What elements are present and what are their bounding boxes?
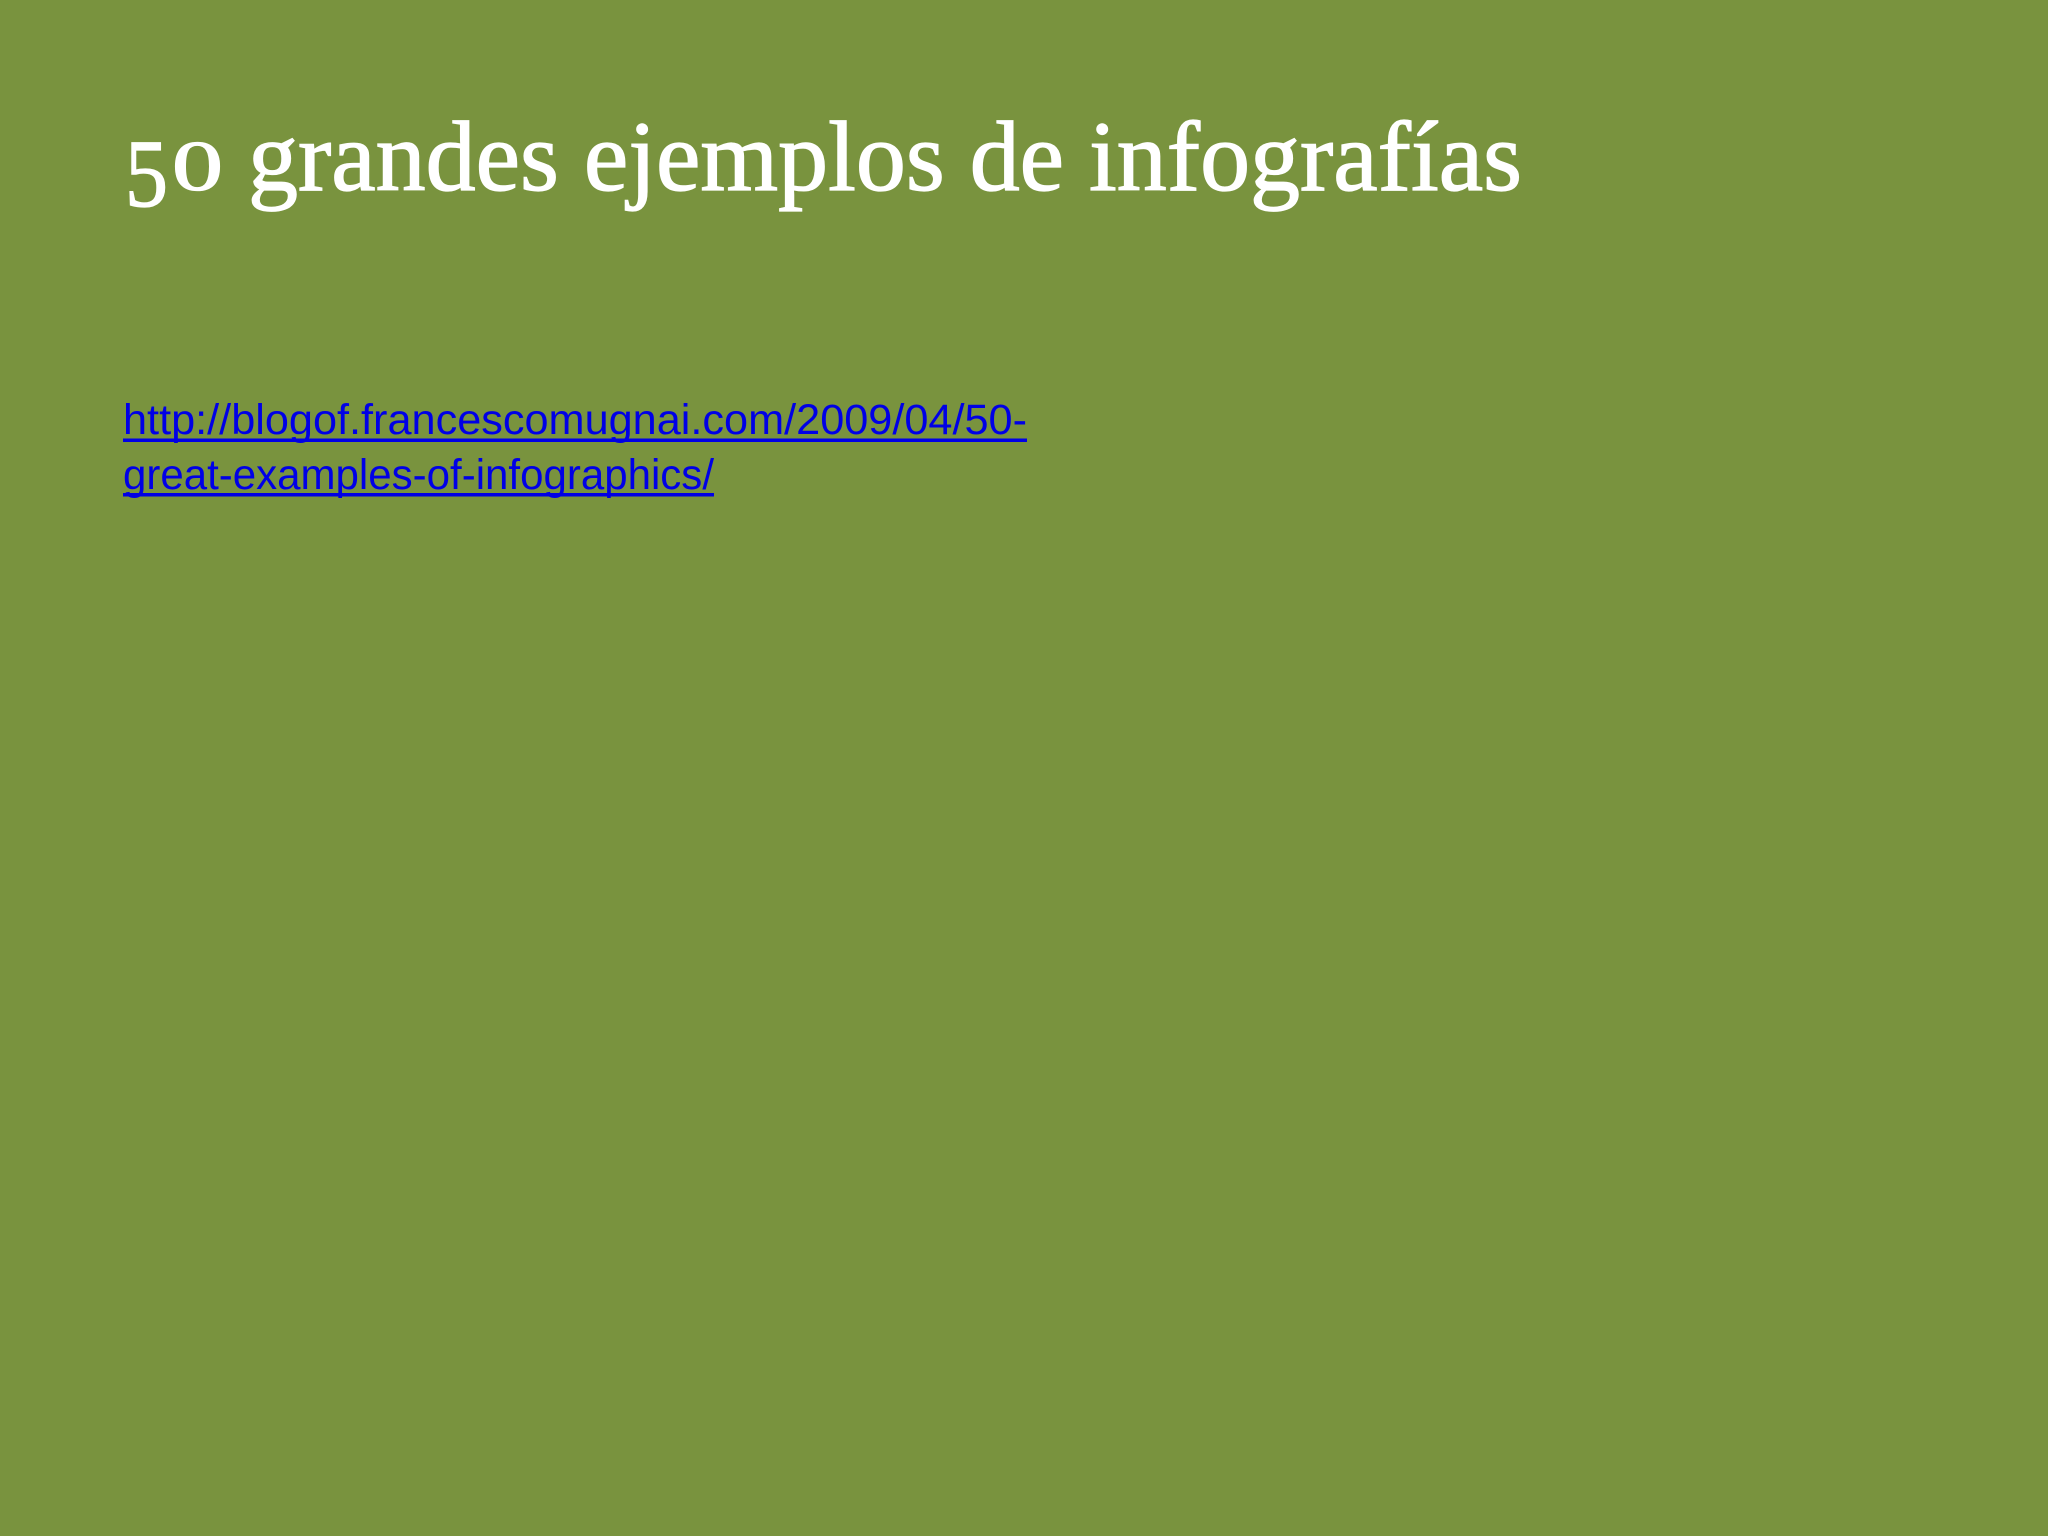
- link text: [123, 396, 1027, 499]
- link text: http://blogof.francescomugnai.com/2009/04/50-: [123, 396, 1027, 444]
- title: 0: [172, 128, 223, 206]
- link text: great-examples-of-infographics/: [123, 451, 714, 499]
- title: 5: [125, 120, 168, 227]
- title: grandes ejemplos de infografías: [248, 101, 1522, 212]
